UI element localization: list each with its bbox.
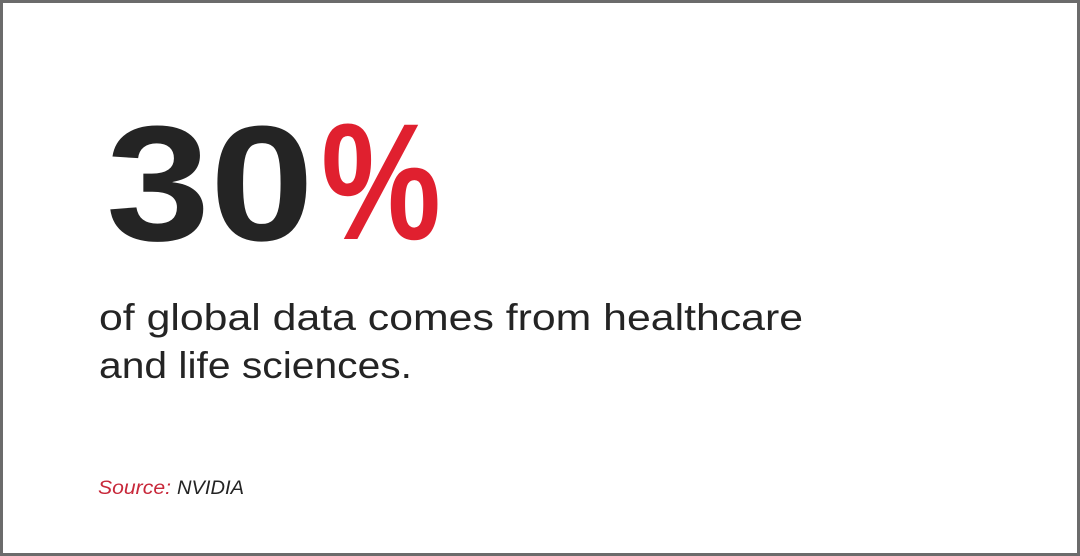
description text: of global data comes from healthcare — [99, 297, 803, 338]
headline stat: 30%: % — [321, 90, 441, 275]
headline stat: 30%: 30 — [106, 92, 314, 275]
source line: NVIDIA — [177, 478, 244, 499]
headline stat: 30% — [106, 90, 441, 275]
description text — [99, 297, 803, 386]
source line — [98, 478, 244, 499]
source line: Source: — [98, 478, 171, 499]
description text: and life sciences. — [99, 345, 412, 386]
